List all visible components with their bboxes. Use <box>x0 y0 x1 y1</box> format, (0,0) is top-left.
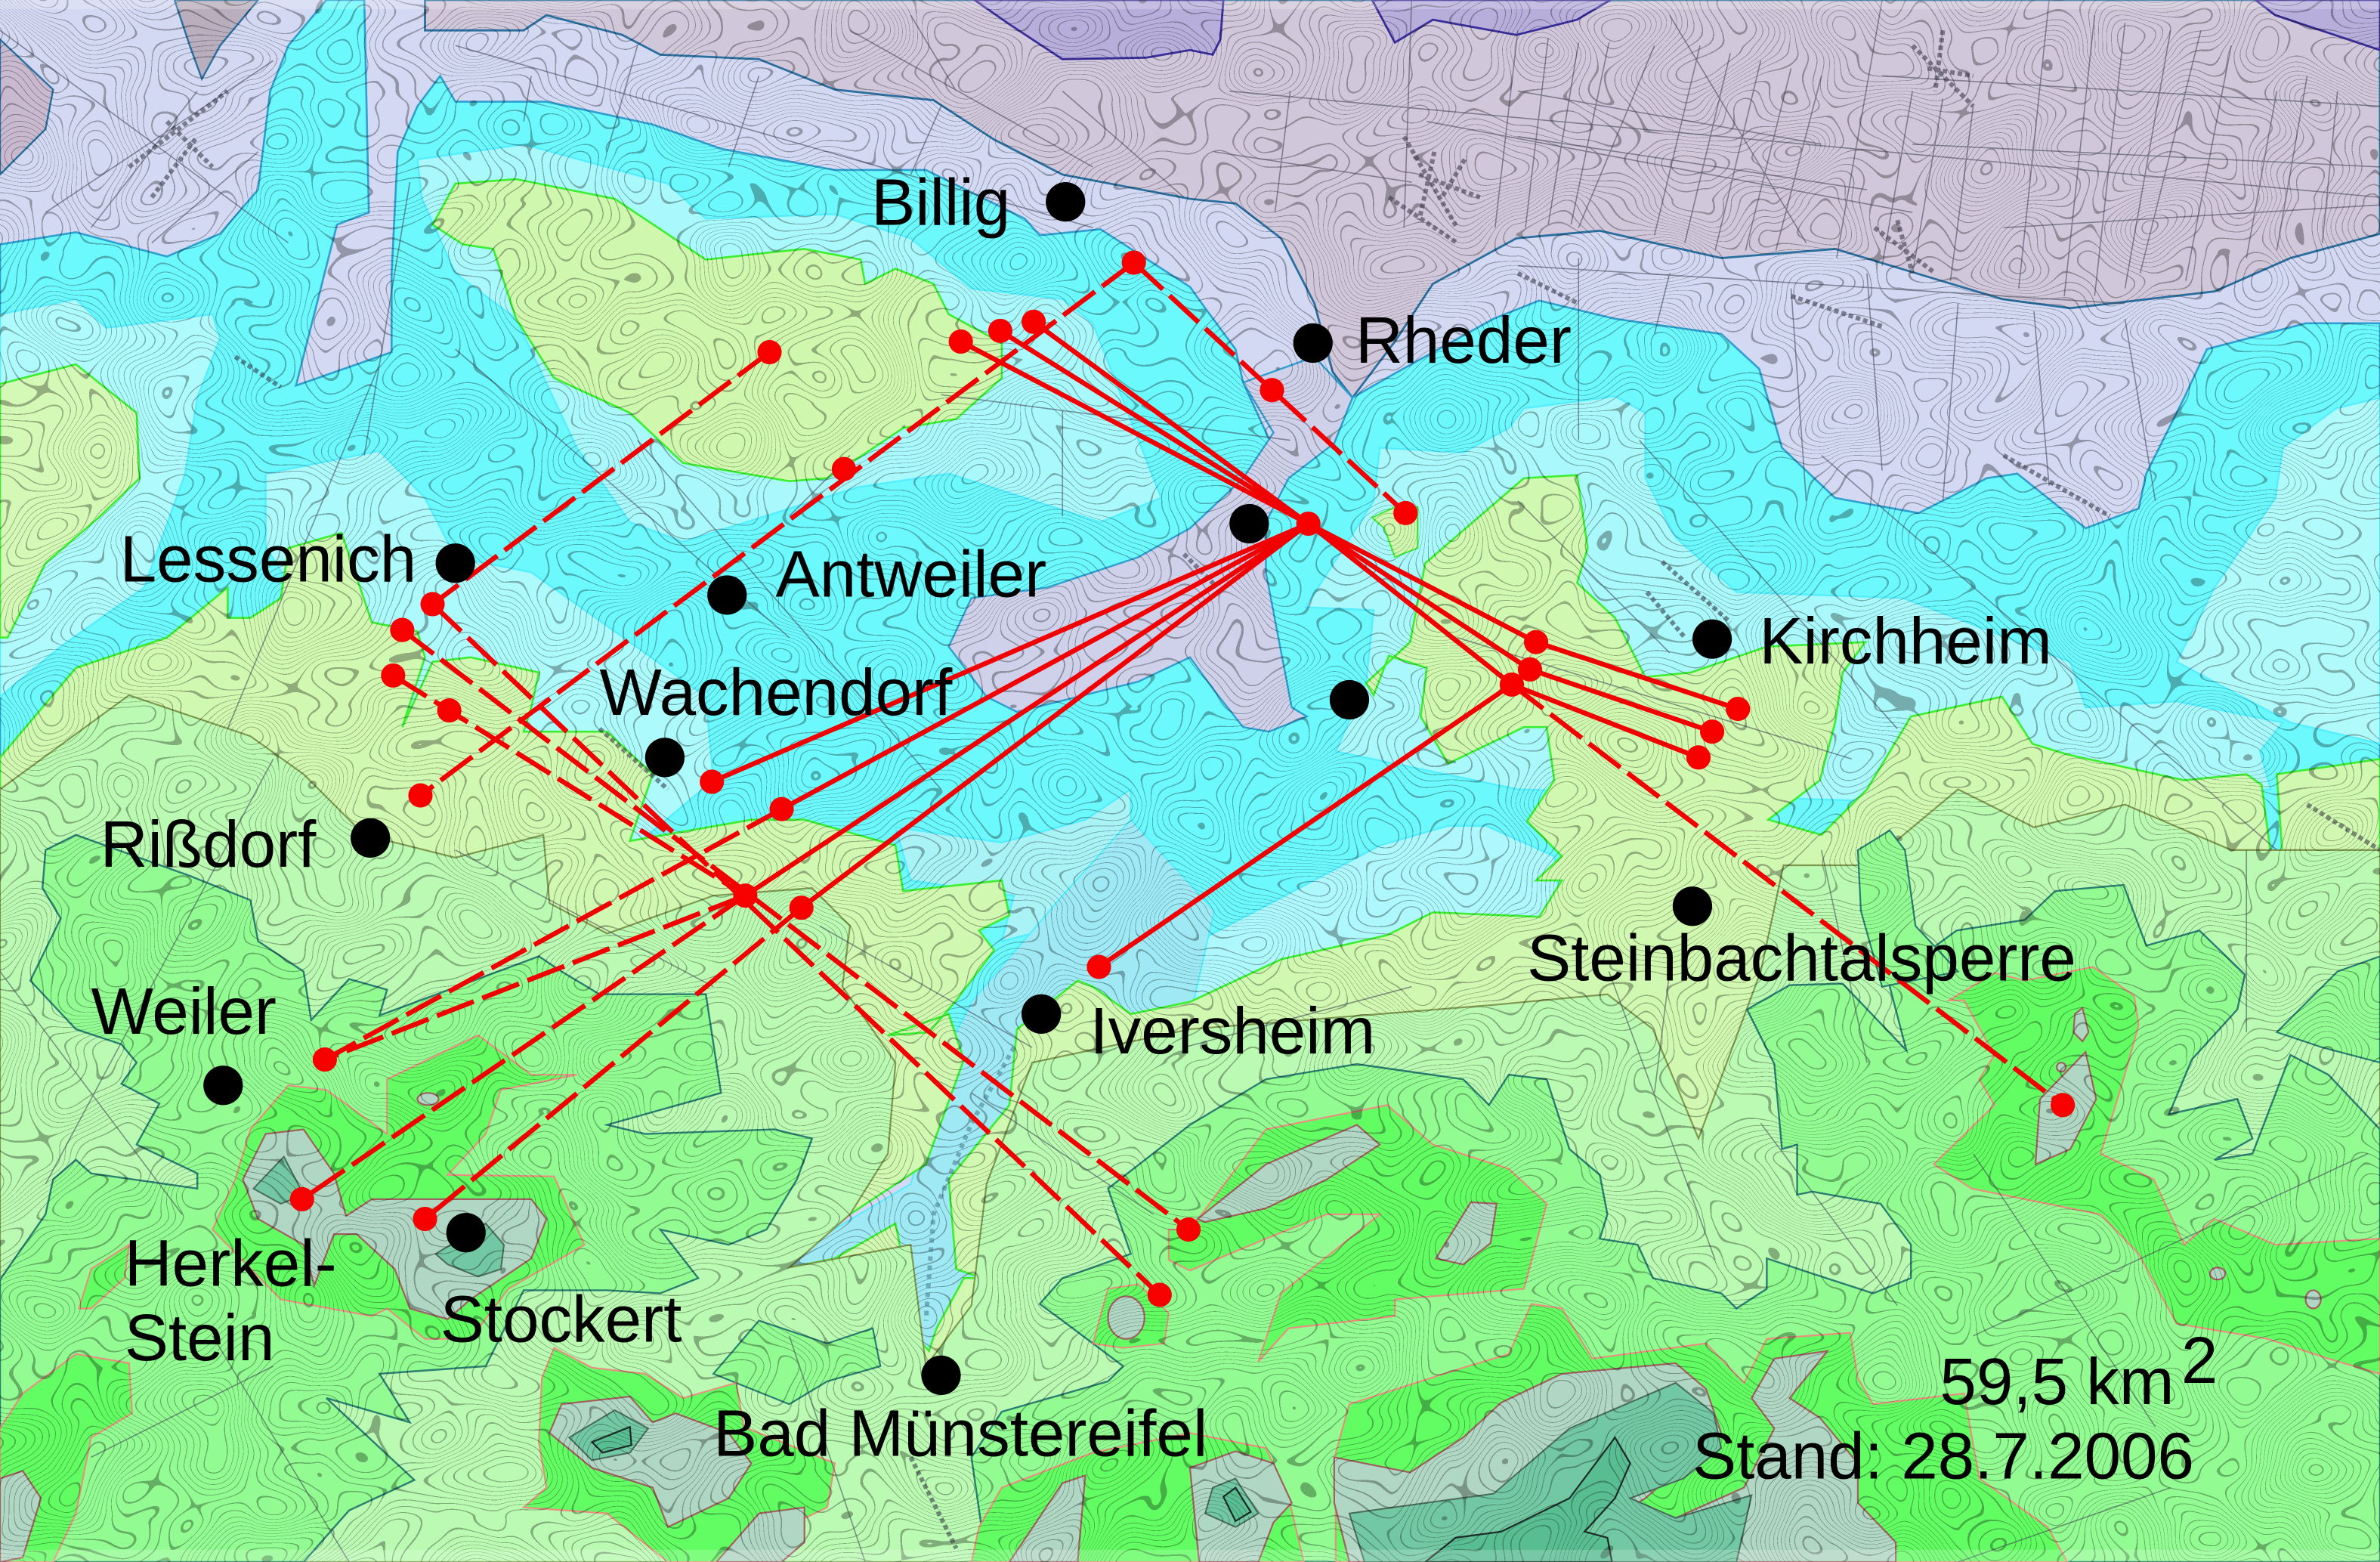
zone: bright green below Stockert <box>524 1348 835 1562</box>
label: Herkel-Stein <box>125 1226 337 1375</box>
zone: southern uplands, pale green <box>0 475 2380 1562</box>
red survey points <box>290 250 2075 1307</box>
zone: river corridor to Bad Münstereifel <box>751 820 1214 1366</box>
label: Stockert: Stockert <box>440 1283 682 1356</box>
zones: bright green west patches <box>0 1245 132 1562</box>
label: Herkel-Stein: Herkel- <box>125 1226 337 1300</box>
zone: bright green east belt <box>1933 967 2380 1374</box>
zone: Billiger Wald hill, pale green <box>433 179 1002 481</box>
date: Stand 28.7.2006: Stand: 28.7.2006 <box>1692 1420 2194 1493</box>
area figure: 59,5 km²: 2 <box>2181 1324 2218 1397</box>
zone: western hill, pale green <box>0 364 140 638</box>
zone: bright green bottom right belt <box>1336 1304 2067 1562</box>
zone: light cyan around Lessenich and Wachendorf <box>266 451 713 850</box>
label: Rheder: Rheder <box>1355 304 1572 377</box>
label: Antweiler: Antweiler <box>776 537 1046 611</box>
label: Iversheim: Iversheim <box>1090 994 1375 1068</box>
zone: light cyan around Billiger Wald <box>417 144 1161 542</box>
network: solid red connections <box>712 322 1738 967</box>
label: Steinbachtalsperre: Steinbachtalsperre <box>1527 922 2076 995</box>
zone: bright green centre-right belt <box>1169 1105 1547 1362</box>
zones: dark teal peak tops <box>253 1157 1751 1562</box>
zone: light cyan east of Rheder and Kirchheim <box>1306 396 2283 805</box>
area figure: 59,5 km² <box>1940 1324 2218 1418</box>
label: Weiler: Weiler <box>91 975 277 1048</box>
zone: bright green summit belt, Herkelstein and Stockert <box>212 1035 584 1339</box>
label: Kirchheim: Kirchheim <box>1759 605 2052 678</box>
zone: light green south of the olive contour <box>0 695 2380 1562</box>
zone: main cyan band <box>0 0 2380 1093</box>
zones: grey-green high summits <box>0 1008 2321 1562</box>
zone: purple top pocket near Ollheim <box>175 0 258 79</box>
label: Rißdorf: Rißdorf <box>100 808 317 881</box>
black town markers <box>203 182 1732 1395</box>
zones: darkest purple at top edge <box>975 0 2380 59</box>
network: dashed red connections <box>302 263 2063 1294</box>
area figure: 59,5 km²: 59,5 km <box>1940 1345 2174 1418</box>
river town Bad Münstereifel: built-up strip <box>926 1047 1014 1321</box>
zone: bright green south of Bad Münstereifel <box>972 1433 1304 1562</box>
label: Lessenich: Lessenich <box>120 522 416 595</box>
label: Wachendorf: Wachendorf <box>600 656 953 729</box>
zone: small bright green summit ring <box>1093 1284 1169 1348</box>
zone: light cyan south centre <box>1093 826 1562 1017</box>
zone: mid green, south-east basin <box>972 885 2380 1562</box>
label: Herkel-Stein: Stein <box>125 1301 274 1375</box>
label: Bad Münstereifel: Bad Münstereifel <box>713 1397 1207 1470</box>
zone: light cyan far east <box>2177 397 2380 744</box>
zone: light cyan near Iversheim valley <box>895 790 1131 941</box>
zone: purple top-left pocket <box>0 39 53 175</box>
zone: light cyan west <box>0 299 220 697</box>
zone: purple north plain <box>425 0 2380 397</box>
zone: mid green lobes by Steinbachtalsperre <box>713 830 2380 1404</box>
map strip: lighter top edge <box>0 0 2380 9</box>
zone: lavender central valley at Rheder <box>949 357 1352 732</box>
zone: small pale patch east of Rheder <box>1372 507 1417 557</box>
map strip: lighter bottom edge <box>0 1550 2380 1562</box>
zone: mid green, western and southern basin <box>0 835 812 1562</box>
label: Billig: Billig <box>871 165 1010 239</box>
zones: darkest green peak cores <box>592 1427 1630 1562</box>
